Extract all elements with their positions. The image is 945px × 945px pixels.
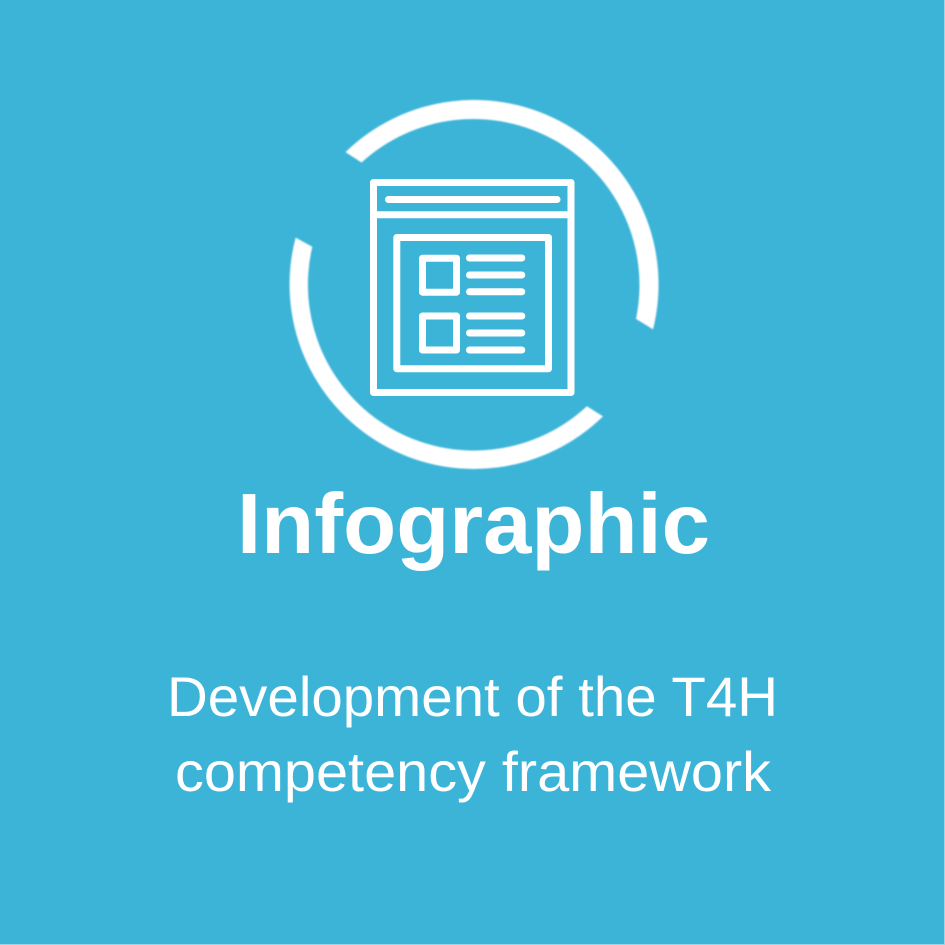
title: Infographic xyxy=(237,477,710,572)
icon: circular arrows ring xyxy=(290,100,659,469)
subtitle xyxy=(167,665,778,803)
icon: browser window document xyxy=(374,182,571,392)
subtitle: competency framework xyxy=(175,740,772,803)
subtitle: Development of the T4H xyxy=(167,665,778,728)
